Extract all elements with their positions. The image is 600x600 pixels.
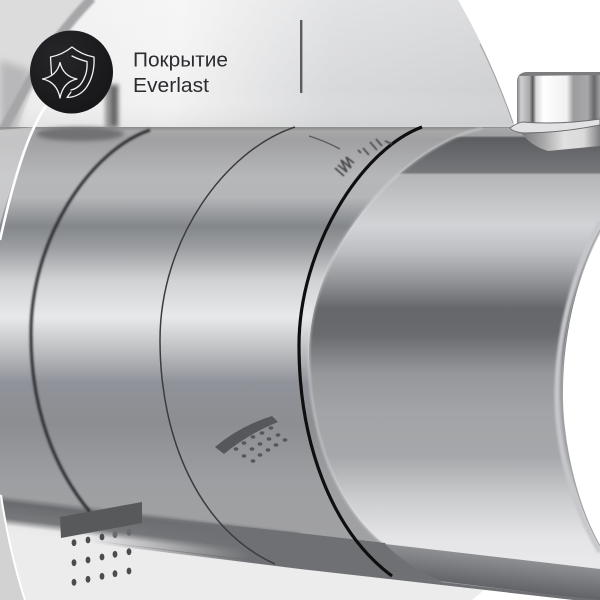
shadow band under cylinder bbox=[2, 496, 300, 556]
spout knob bbox=[510, 72, 600, 151]
seam 2 bbox=[160, 127, 295, 564]
icon: overhead shower bbox=[60, 502, 142, 586]
scale tick bbox=[309, 136, 340, 149]
band between seam and cap curve bbox=[299, 533, 442, 582]
left outer ring bbox=[0, 0, 96, 127]
badge icon: shield with sparkle bbox=[30, 30, 113, 114]
knob flange bbox=[510, 119, 600, 133]
cylinder: rings bbox=[0, 127, 523, 592]
plate lower area bbox=[195, 557, 484, 600]
knob body bbox=[517, 72, 600, 127]
sparkle bbox=[42, 62, 77, 98]
knob top lip bbox=[519, 72, 600, 76]
shield inner line bbox=[71, 56, 87, 90]
icon: hand shower bbox=[215, 416, 287, 463]
shield outline bbox=[50, 47, 94, 98]
lower band edge bbox=[90, 540, 600, 600]
cylinder: end cap face bbox=[309, 127, 600, 570]
darker band toward the seam bbox=[100, 518, 299, 566]
ring light wedge bbox=[0, 127, 36, 225]
right white end bbox=[557, 222, 600, 552]
plate left rim bbox=[0, 492, 25, 600]
seam 3 bbox=[299, 127, 422, 576]
scale marks bbox=[335, 139, 392, 176]
seam 1 bbox=[31, 130, 150, 512]
blurred rear screw bbox=[36, 84, 124, 141]
badge label: Everlast bbox=[133, 75, 209, 97]
ring highlight bbox=[0, 106, 46, 240]
badge label: Покрытие bbox=[133, 50, 228, 72]
cap lower band bbox=[385, 544, 600, 600]
badge label bbox=[134, 52, 228, 92]
knob bowl bbox=[522, 126, 600, 151]
plate centre mark bbox=[300, 20, 302, 93]
cap bevel bbox=[309, 128, 482, 545]
